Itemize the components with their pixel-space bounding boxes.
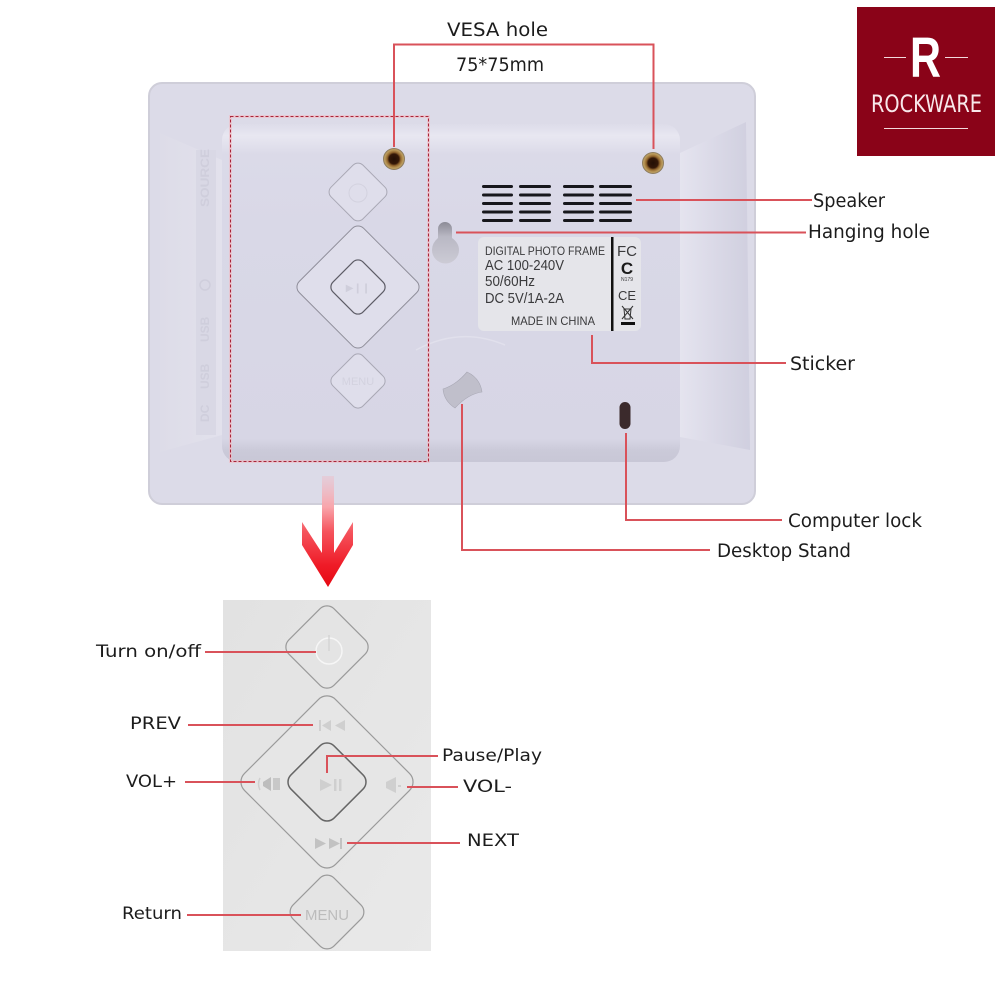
button: power <box>282 602 372 692</box>
label: speaker: Speaker <box>813 191 885 212</box>
label: desktop stand: Desktop Stand <box>717 541 851 562</box>
sticker: N179 <box>621 277 633 283</box>
play button <box>328 257 388 317</box>
frame rear panel <box>149 83 755 504</box>
sticker: MADE IN CHINA <box>511 314 595 328</box>
arrow down <box>302 476 353 587</box>
sticker: 50/60Hz <box>485 274 535 290</box>
icon: previous <box>319 720 345 731</box>
port labels on side slot: DC <box>198 404 212 422</box>
label: pause/play: Pause/Play <box>442 746 542 765</box>
callout lines: lower <box>185 652 460 915</box>
port labels on side slot: USB <box>198 363 212 389</box>
sticker: C <box>621 259 633 278</box>
icon: volume up <box>258 777 280 791</box>
label: vol-: VOL- <box>463 777 512 796</box>
heading: VESA size: 75*75mm <box>456 55 544 76</box>
VESA screw left <box>383 148 405 170</box>
sticker: DC 5V/1A-2A <box>485 291 564 307</box>
heading: VESA hole: VESA hole <box>447 20 548 41</box>
label: return: Return <box>122 904 182 923</box>
sticker: DIGITAL PHOTO FRAME <box>485 244 605 258</box>
port labels on side slot: USB <box>198 316 212 342</box>
logo: Rockware: R <box>910 26 941 90</box>
control buttons on frame: ▶❙❙ <box>346 283 370 294</box>
sticker: CE <box>618 288 636 303</box>
sticker <box>478 237 641 331</box>
sticker: FC <box>617 243 637 260</box>
callout lines: upper <box>394 44 812 550</box>
button text: MENU: MENU <box>305 907 349 924</box>
dashed highlight rectangle <box>230 116 428 462</box>
menu button <box>328 351 388 411</box>
label: prev: PREV <box>130 714 182 733</box>
label: next: NEXT <box>467 831 520 850</box>
VESA screw right <box>642 152 664 174</box>
port labels on side slot: SOURCE <box>198 149 212 207</box>
speaker grille <box>482 185 632 222</box>
icon: play pause <box>320 779 342 791</box>
label: vol+: VOL+ <box>126 772 177 791</box>
hanging keyhole <box>432 222 459 264</box>
label: hanging hole: Hanging hole <box>808 222 930 243</box>
control buttons on frame: MENU <box>342 376 374 388</box>
port labels on side slot <box>198 149 212 422</box>
desktop stand hole <box>443 372 482 408</box>
logo: Rockware <box>857 7 995 156</box>
button: pause play <box>284 739 370 825</box>
control buttons on frame <box>294 160 422 411</box>
panel: button close-up <box>223 600 431 953</box>
label: computer lock: Computer lock <box>788 511 922 532</box>
label: turn on/off: Turn on/off <box>95 642 202 661</box>
icon: volume down <box>386 777 401 793</box>
direction button <box>294 223 422 351</box>
power button <box>326 160 390 224</box>
button: direction ring <box>236 691 418 873</box>
sticker: AC 100-240V <box>485 258 564 274</box>
button: menu <box>286 871 368 953</box>
computer lock slot <box>620 402 630 429</box>
label: sticker: Sticker <box>790 354 855 375</box>
icon: next <box>315 838 342 849</box>
